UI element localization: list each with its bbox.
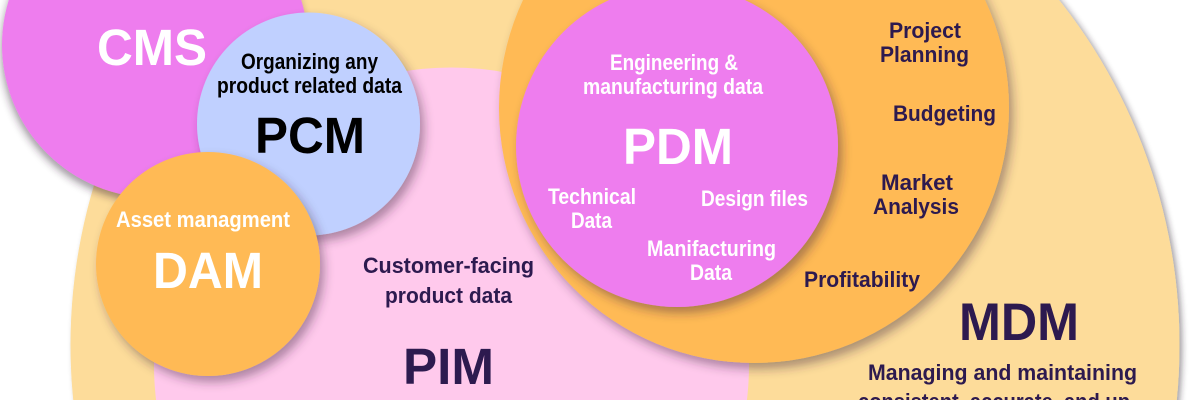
text: Technical Data: Data	[571, 208, 613, 233]
text: PDM description	[583, 50, 764, 99]
panel: PIM circle	[154, 68, 749, 400]
text: Technical Data: Technical	[548, 184, 636, 209]
heading: PDM: PDM	[623, 118, 733, 175]
text: PIM description: Customer-facing	[363, 253, 534, 278]
text: Market Analysis: Analysis	[873, 194, 959, 219]
panel: project management circle	[499, 0, 1009, 363]
panel: CMS circle	[2, 0, 308, 198]
text: Market Analysis: Market	[881, 170, 954, 195]
text: DAM description: Asset managment	[116, 207, 291, 232]
text: PCM description: product related data	[217, 73, 403, 98]
heading: DAM: DAM	[153, 242, 263, 299]
text: Manufacturing Data: Data	[690, 260, 733, 285]
heading: MDM: MDM	[959, 293, 1079, 352]
text: Project Planning: Planning	[880, 42, 969, 67]
text: PCM description: Organizing any	[241, 49, 379, 74]
text: MDM description	[858, 360, 1137, 400]
text: Market Analysis	[873, 170, 959, 219]
heading: CMS: CMS	[97, 19, 207, 76]
text: PIM description	[363, 253, 534, 308]
text: PDM description: manufacturing data	[583, 74, 764, 99]
heading: PCM: PCM	[255, 107, 365, 164]
text: Budgeting: Budgeting	[893, 101, 996, 126]
panel: PCM circle	[197, 12, 420, 236]
text: Manufacturing Data: Manifacturing	[647, 236, 776, 261]
text: Design files: Design files	[701, 186, 808, 211]
text: Project Planning: Project	[889, 18, 962, 43]
text: PDM description: Engineering &	[610, 50, 738, 75]
text: Technical Data	[548, 184, 636, 233]
text: PIM description: product data	[385, 283, 513, 308]
text: MDM description: Managing and maintaining	[868, 360, 1137, 385]
panel: PDM circle	[516, 0, 838, 307]
text: PCM description	[217, 49, 403, 98]
text: Manufacturing Data	[647, 236, 776, 285]
panel: DAM circle	[96, 152, 320, 376]
text: Project Planning	[880, 18, 969, 67]
text: Profitability: Profitability	[804, 267, 921, 292]
heading: PIM: PIM	[403, 338, 494, 395]
